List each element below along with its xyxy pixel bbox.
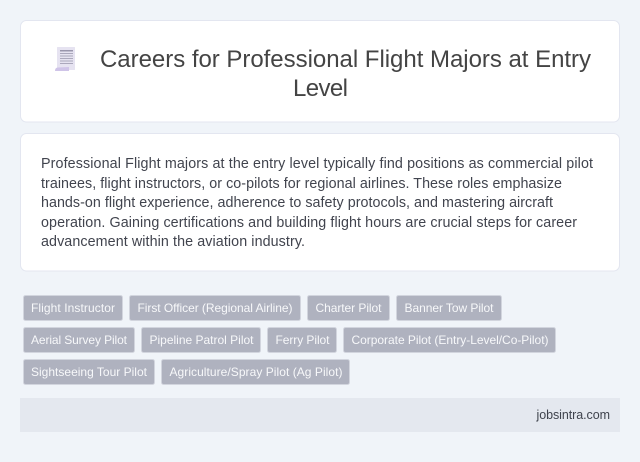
text block: description: operation. Gaining certifications and building flight hours are crucial steps for career (41, 215, 577, 231)
tag: Ferry Pilot: Ferry Pilot (276, 333, 330, 347)
tag: Pipeline Patrol Pilot (142, 328, 260, 352)
tag: Ferry Pilot (268, 328, 336, 352)
tag: Pipeline Patrol Pilot: Pipeline Patrol Pilot (150, 333, 254, 347)
text block: description: hands-on flight experience, adherence to safety protocols, and mastering aircraft (41, 195, 553, 211)
tag list (24, 296, 556, 384)
tag: Agriculture/Spray Pilot: Agriculture/Spray Pilot (Ag Pilot) (170, 365, 342, 379)
tag: Charter Pilot (308, 296, 390, 320)
title: Level (293, 75, 348, 102)
tag: Banner Tow Pilot: Banner Tow Pilot (404, 301, 494, 315)
tag: Flight Instructor (24, 296, 122, 320)
tag: First Officer (130, 296, 300, 320)
tag: Corporate Pilot: Corporate Pilot (Entry-Level/Co-Pilot) (352, 333, 548, 347)
tag: Corporate Pilot (344, 328, 556, 352)
title (100, 46, 591, 102)
footer bar (20, 398, 620, 432)
tag: Sightseeing Tour Pilot (24, 360, 154, 384)
tag: Banner Tow Pilot (396, 296, 502, 320)
text block: description: advancement within the aviation industry. (41, 234, 305, 250)
footer text: jobsintra.com (536, 408, 610, 422)
tag: Sightseeing Tour Pilot: Sightseeing Tour Pilot (31, 365, 148, 379)
tag: Aerial Survey Pilot (24, 328, 134, 352)
icon: document scroll (55, 47, 75, 71)
panel: title card (20, 20, 620, 122)
tag: Flight Instructor: Flight Instructor (31, 301, 115, 315)
tag: Agriculture/Spray Pilot (162, 360, 350, 384)
text block: description (41, 156, 593, 250)
panel: description (20, 134, 620, 271)
tag: Charter Pilot: Charter Pilot (316, 301, 382, 315)
tag: Aerial Survey Pilot: Aerial Survey Pilot (31, 333, 128, 347)
text block: description: Professional Flight majors at the entry level typically find positions as commercial pilot (41, 156, 593, 172)
tag: First Officer: First Officer (Regional Airline) (138, 301, 292, 315)
title: Careers for Professional Flight Majors at Entry (100, 46, 591, 73)
text block: description: trainees, flight instructors, or co-pilots for regional airlines. These roles emphasize (41, 176, 562, 192)
